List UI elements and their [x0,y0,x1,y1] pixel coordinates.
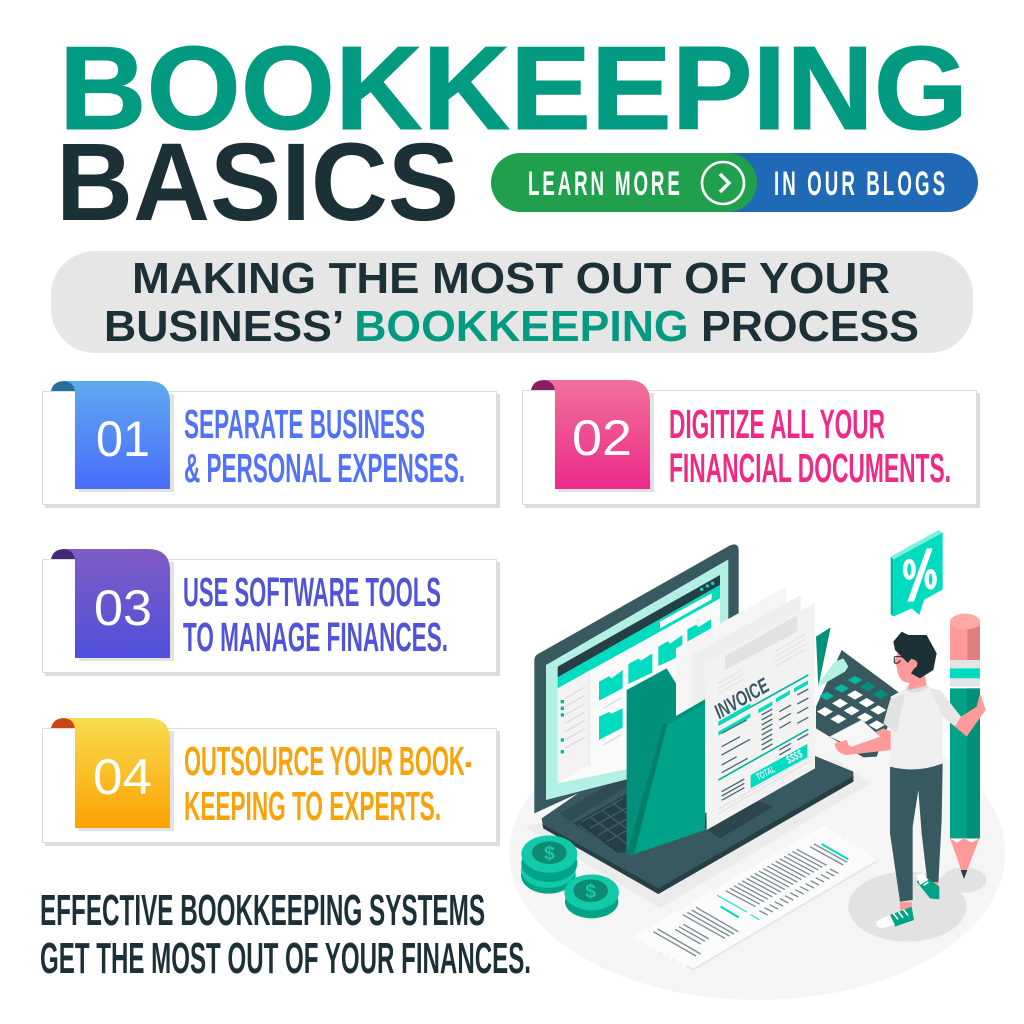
calculator [816,650,900,757]
percent sign [905,548,935,602]
subtitle line 1: MAKING THE MOST OUT OF YOUR [132,254,890,303]
step 03 line 1: USE SOFTWARE TOOLS [183,569,441,615]
folder back [627,668,676,853]
coins [521,835,619,918]
number 01: 01 [96,411,150,467]
coin symbols: $ [544,843,555,864]
title: Basics: BASICS [56,121,459,244]
coin symbols [544,843,596,902]
closing statement: EFFECTIVE BOOKKEEPING SYSTEMS [40,886,485,935]
percent bubble [891,530,943,617]
subtitle line 2: BUSINESS’ BOOKKEEPING PROCESS [104,302,919,351]
button label: learn more: LEARN MORE [528,164,680,202]
step 01 line 2: & PERSONAL EXPENSES. [184,445,465,491]
number 03: 03 [94,580,152,636]
invoice heading: INVOICE [710,674,774,724]
person [830,614,986,942]
total amount: $$$$ [784,748,805,767]
number 02: 02 [572,410,632,466]
subtitle panel [51,251,973,353]
button: learn more in our blogs [491,153,978,212]
panel: step 03 [42,549,500,676]
closing statement [40,886,531,983]
invoice document [705,603,815,830]
laptop [534,544,853,894]
illustration: bookkeeping scene [509,530,1005,1000]
title: Bookkeeping: BOOKKEEPING [59,22,968,155]
panel: step 02 [522,380,980,508]
paper stack [676,587,801,820]
step 04 line 2: KEEPING TO EXPERTS. [184,783,441,829]
folder front [627,699,705,855]
coin symbols: $ [585,881,596,902]
receipt [633,826,877,971]
ground ellipse [509,707,1005,1000]
pencil [950,614,980,879]
button label: in our blogs: IN OUR BLOGS [774,164,945,202]
closing statement: GET THE MOST OUT OF YOUR FINANCES. [40,934,531,983]
icon: arrow circle [702,162,744,204]
total label: TOTAL [755,764,777,783]
step 01 line 1: SEPARATE BUSINESS [184,401,425,447]
step 03 line 2: TO MANAGE FINANCES. [183,614,448,660]
panel: step 01 [42,381,500,508]
panel: step 04 [42,718,500,846]
icons: screen folders [599,619,711,740]
notepad [830,720,880,747]
step 04 line 1: OUTSOURCE YOUR BOOK- [184,738,472,784]
number 04: 04 [93,749,152,805]
